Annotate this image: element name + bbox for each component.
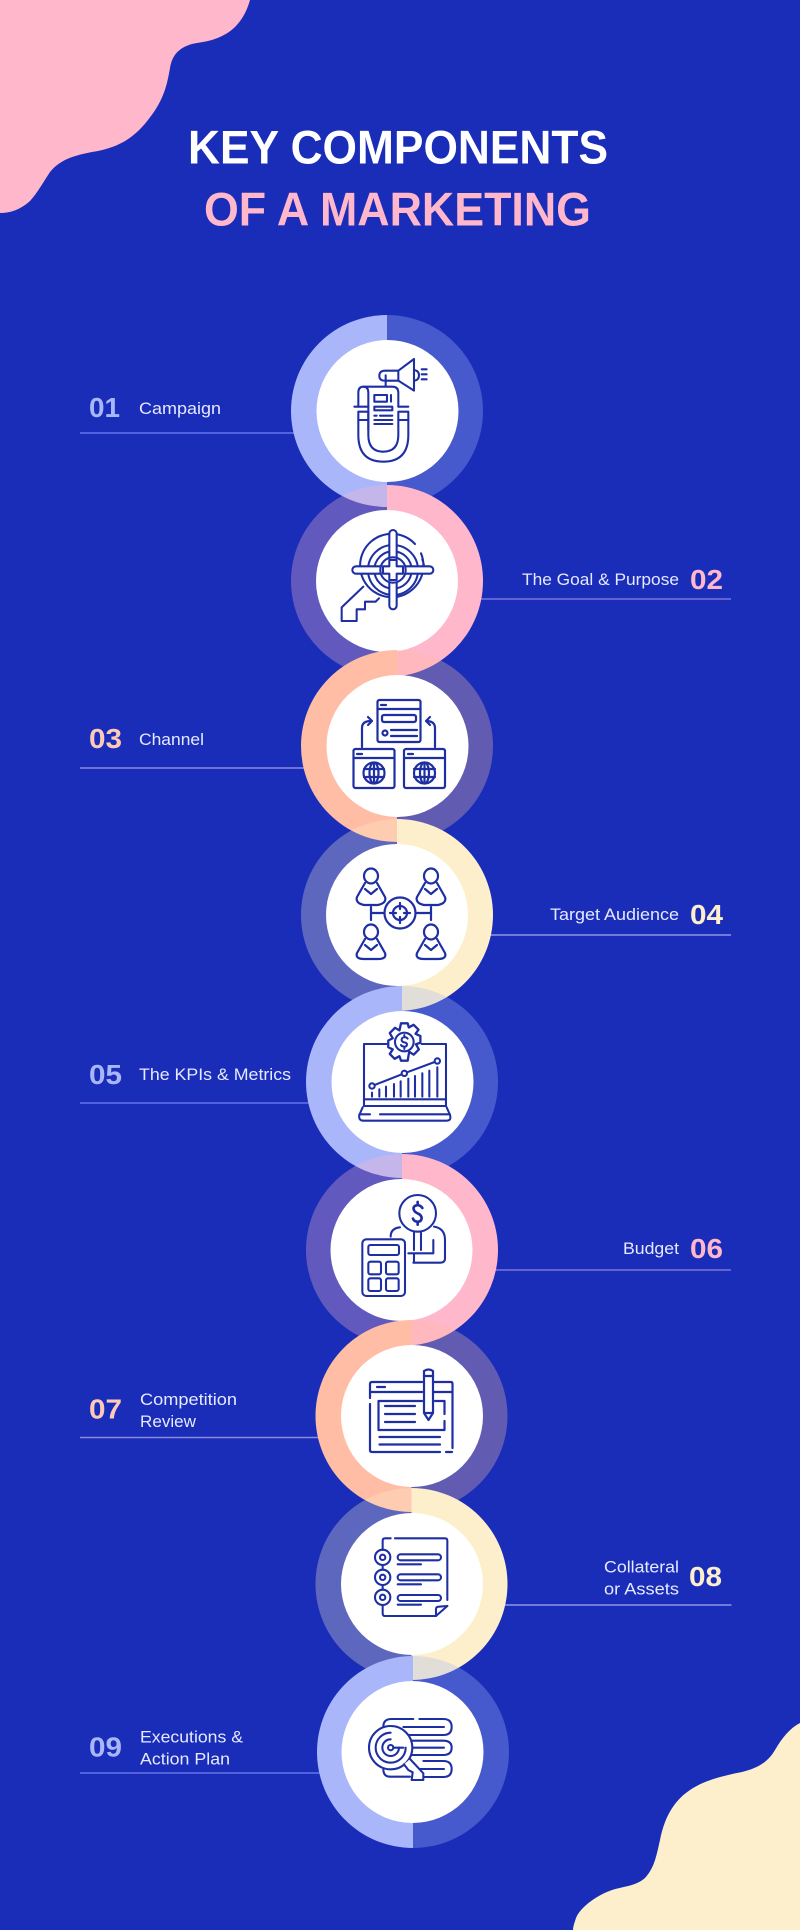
- title line 1: KEY COMPONENTS: [188, 120, 608, 174]
- item 03: Channel: [80, 650, 493, 842]
- label Budget: Budget: [623, 1239, 679, 1258]
- icon: checklist document: [375, 1538, 447, 1616]
- number 04: 04: [690, 899, 723, 930]
- label Competition Review: Competition: [140, 1390, 237, 1409]
- number 03: 03: [89, 723, 122, 754]
- icon: magnet and megaphone: [354, 359, 427, 462]
- label The KPIs & Metrics: The KPIs & Metrics: [139, 1065, 291, 1084]
- label Target Audience: Target Audience: [550, 905, 679, 924]
- number 01: 01: [89, 392, 120, 423]
- number 07: 07: [89, 1394, 122, 1424]
- leader line 01: [80, 432, 296, 434]
- number 08: 08: [689, 1561, 722, 1592]
- number 06: 06: [690, 1233, 723, 1264]
- blob: top-left pink: [0, 0, 250, 213]
- leader line 07: [80, 1436, 320, 1438]
- label Executions & Action Plan: Executions &: [140, 1728, 244, 1746]
- item 06: Budget: [306, 1154, 731, 1346]
- label Executions & Action Plan: Action Plan: [140, 1750, 230, 1768]
- leader line 04: [488, 934, 731, 936]
- label Competition Review: [140, 1390, 237, 1431]
- leader line 06: [492, 1269, 731, 1271]
- number 09: 09: [89, 1732, 122, 1762]
- ring 09: [317, 1656, 509, 1848]
- label Campaign: Campaign: [139, 399, 221, 418]
- label Executions & Action Plan: [140, 1728, 244, 1768]
- icon: laptop with growth chart: [359, 1023, 450, 1121]
- icon: target magnifier with key and stacked bars: [369, 1719, 452, 1780]
- title: [188, 120, 608, 236]
- label Collateral or Assets: or Assets: [604, 1580, 679, 1598]
- title line 2: OF A MARKETING: [204, 182, 591, 236]
- leader line 02: [478, 598, 731, 600]
- leader line 09: [80, 1772, 322, 1774]
- label The Goal & Purpose: The Goal & Purpose: [522, 570, 679, 589]
- icon: target and key: [342, 530, 433, 621]
- number 05: 05: [89, 1059, 122, 1090]
- icon: calculator and finance person: [362, 1195, 445, 1296]
- leader line 08: [502, 1604, 732, 1606]
- number 02: 02: [690, 564, 723, 595]
- ring 08: [316, 1488, 508, 1680]
- label Collateral or Assets: [604, 1558, 679, 1598]
- ring 03: [301, 650, 493, 842]
- icon: linked web pages: [354, 700, 445, 788]
- icon: document editing with pencil: [370, 1370, 452, 1452]
- ring 04: [301, 819, 493, 1011]
- ring 07: [316, 1320, 508, 1512]
- item 01: Campaign: [80, 315, 483, 507]
- ring 05: [306, 986, 498, 1178]
- item 07: Competition Review: [80, 1320, 508, 1512]
- ring 01: [291, 315, 483, 507]
- item 05: The KPIs & Metrics: [80, 986, 498, 1178]
- label Collateral or Assets: Collateral: [604, 1558, 679, 1576]
- label Competition Review: Review: [140, 1412, 197, 1431]
- leader line 03: [80, 767, 306, 769]
- item 04: Target Audience: [301, 819, 731, 1011]
- icon: audience around a target: [357, 868, 445, 959]
- item 08: Collateral or Assets: [316, 1488, 732, 1680]
- ring 06: [306, 1154, 498, 1346]
- leader line 05: [80, 1102, 312, 1104]
- blob: bottom-right cream: [573, 1723, 800, 1930]
- label Channel: Channel: [139, 730, 204, 749]
- item 09: Executions & Action Plan: [80, 1656, 509, 1848]
- item 02: The Goal & Purpose: [291, 485, 731, 677]
- ring 02: [291, 485, 483, 677]
